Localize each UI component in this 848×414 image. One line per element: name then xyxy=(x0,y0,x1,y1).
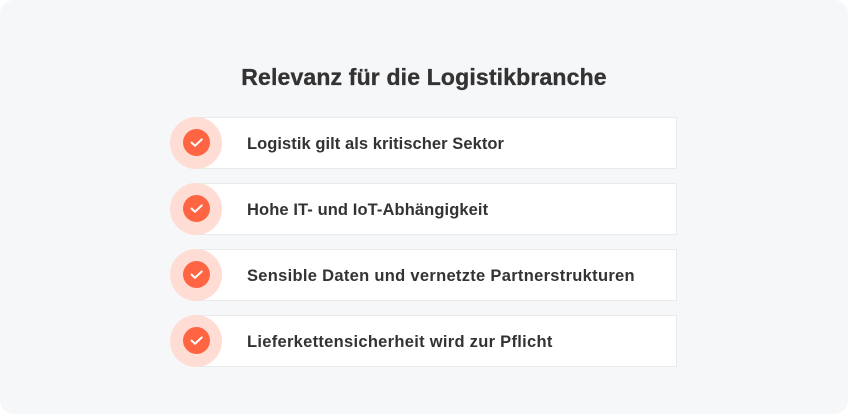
list item 1 xyxy=(170,117,677,169)
icon: check badge 2 xyxy=(170,183,222,235)
text: item 3: Sensible Daten und vernetzte Partnerstrukturen xyxy=(247,267,635,285)
list item 3 xyxy=(170,249,677,301)
icon: check badge 3 xyxy=(170,249,222,301)
text: item 1: Logistik gilt als kritischer Sektor xyxy=(247,135,504,153)
icon: check badge 4 xyxy=(170,315,222,367)
text: item 4: Lieferkettensicherheit wird zur Pflicht xyxy=(247,333,553,351)
text: item 2: Hohe IT- und IoT-Abhängigkeit xyxy=(247,201,488,219)
list item 4 xyxy=(170,315,677,367)
title: Relevanz für die Logistikbranche xyxy=(241,64,607,90)
list item 2 xyxy=(170,183,677,235)
icon: check badge 1 xyxy=(170,117,222,169)
